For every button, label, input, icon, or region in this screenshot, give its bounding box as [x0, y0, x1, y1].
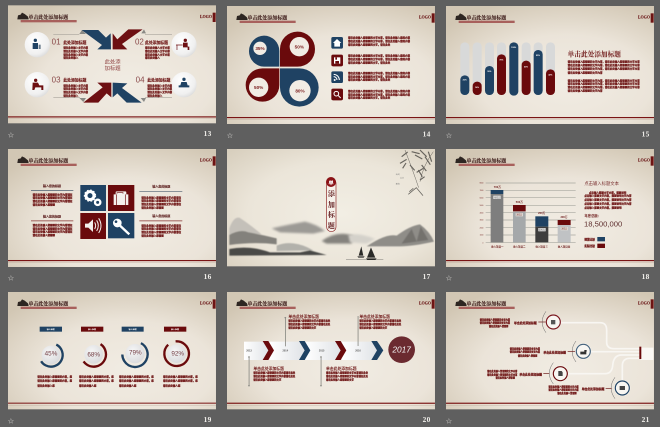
ring captions: 请在此处输入您 — [79, 383, 97, 387]
slide number: 13 — [204, 129, 212, 138]
row text 4: 请在此处输入您需要的文字，请在此处 — [348, 96, 391, 100]
item 01: 请在此处输入文字内容 — [63, 46, 89, 50]
ring 92% — [163, 327, 190, 367]
footer rule — [8, 116, 216, 119]
footer rule — [8, 260, 216, 263]
callout 2013: 请在此处输入您需要的文字内容请在此处 — [253, 374, 296, 378]
capsule bar chart: 42% — [548, 74, 553, 77]
ring captions: 请在此处输入您 — [37, 383, 55, 387]
text block: 请在此处输入您需要的文字内容，请在此处输入您需要的文字内容 — [568, 85, 640, 89]
slide header: LOGO — [419, 301, 431, 306]
text block: upper left: 请在此处输入您需要的文字内容请在 — [33, 193, 73, 197]
item 01: 请在此处输入文字内容 — [63, 52, 89, 56]
row text 3 — [348, 71, 411, 82]
callout 2015 — [326, 366, 369, 381]
total amount: 18,500,000 — [584, 219, 622, 228]
slide header — [455, 156, 654, 166]
slide header: LOGO — [200, 14, 212, 19]
text block: lower left: 请在此处输入您需要的文字内容请在 — [33, 226, 73, 230]
paper background — [227, 149, 435, 266]
text block: lower right: 输入您的标题 — [152, 213, 170, 218]
panel: slide 15 capsule bars — [446, 6, 654, 140]
callout 2014: 单击此处添加标题 — [288, 314, 319, 319]
paper background — [446, 292, 654, 409]
ring 45% — [35, 327, 67, 371]
stacked bar chart: 200万 — [560, 215, 568, 219]
stacked bar chart: 0 — [482, 242, 483, 244]
tile: speaker — [80, 213, 106, 239]
node 3: 请在此处输入您需要的文字内容 — [487, 372, 518, 376]
item 01: 请在此处输入 — [63, 56, 79, 60]
capsule bar chart: 60% — [524, 67, 528, 69]
text block: lower left — [31, 214, 73, 237]
panel: slide 18 stacked bars — [446, 149, 654, 282]
chart heading: 点击输入标题文本 — [584, 180, 620, 187]
item 03: 此处添加标题 — [63, 78, 86, 83]
ring captions: 请在此处输入您 — [163, 383, 181, 387]
footer rule — [227, 403, 435, 405]
stacked bar chart: 8000 — [480, 183, 483, 185]
row text 1: 请在此处输入您需要的文字内容，请在此处输入您的内容 — [348, 36, 411, 40]
capsule bar chart: 50% — [487, 71, 492, 73]
slide header: LOGO — [638, 15, 650, 20]
panel: slide 13 four arrows — [8, 5, 216, 139]
icon: rss — [331, 71, 343, 83]
item 03: 请在此处输入文字内容 — [63, 83, 89, 87]
legend: 实际比较 — [584, 244, 595, 248]
paper background — [446, 6, 654, 124]
slide header: 单击此处添加标题 — [28, 301, 68, 308]
slide number: 21 — [642, 415, 650, 424]
slide header — [17, 156, 216, 166]
item 03: 请在此处输入文字内容 — [63, 90, 89, 94]
capsule bar chart: 75% — [499, 60, 504, 62]
callout 2014 — [288, 314, 331, 329]
panel: slide 17 ink landscape — [227, 149, 435, 281]
timeline band: 2014 — [283, 349, 289, 352]
ring captions: 请在此处输入您 — [119, 383, 137, 387]
year badge 2017 — [388, 336, 415, 363]
row text 3: 请在此处输入您需要的文字内容，请在此处输入您的内容 — [348, 74, 411, 78]
timeline band: 2016 — [355, 349, 361, 352]
slide header: 单击此处添加标题 — [28, 158, 68, 165]
icon: home — [331, 37, 343, 49]
item 03: 请在此处输入 — [63, 93, 79, 97]
text block: upper right: 请在此处输入您需要的文字内容请在 — [141, 199, 182, 203]
slide header: 单击此处添加标题 — [247, 15, 287, 22]
ring 92%: 92% — [171, 350, 184, 357]
slide header: LOGO — [200, 301, 212, 306]
stacked bar chart: 3000 — [480, 220, 483, 222]
stacked bar chart: 300万 — [561, 228, 568, 231]
bamboo — [400, 150, 433, 196]
item 04: 请在此处输入文字内容 — [147, 90, 173, 94]
text block: lower left: 请在此处输入您需要的文字内容请在 — [33, 223, 73, 227]
node 4 — [548, 377, 630, 399]
item 02: 02 — [135, 37, 144, 46]
stacked bar chart: 200万 — [538, 211, 546, 215]
item 01: 01 — [52, 37, 61, 46]
ring captions: 请在此处输入您需要的内容，您 — [79, 379, 114, 383]
node 1: 单击此处添加标题 — [514, 321, 537, 325]
callout 2016: 单击此处添加标题 — [359, 314, 390, 319]
panel: slide 21 pipeline — [446, 292, 654, 425]
stacked bar chart: 300万 — [539, 229, 546, 232]
node 4: 请在此处输入您需要的文字内容 — [548, 388, 579, 392]
ring 68%: 68% — [87, 351, 100, 358]
callout 2016: 请在此处输入您需要的文字内容请在此处 — [359, 319, 402, 323]
text block: lower left: 请在此处输入您需要 — [33, 233, 56, 237]
stacked bar chart: 5000 — [480, 205, 483, 207]
text block: 请在此处输入您需要的文字内容，请在此处输入您需要的文字内容 — [568, 63, 640, 67]
node 1: 请在此处输入您需要的文字内容 — [480, 321, 511, 325]
vertical title: 单 — [328, 178, 334, 186]
ring 45%: 输入标题 — [47, 327, 55, 331]
callout 2013: 单击此处添加标题 — [253, 366, 284, 371]
vertical title: 标 — [328, 210, 336, 219]
legend — [584, 237, 605, 248]
node 1 — [480, 311, 561, 333]
slide header: LOGO — [638, 158, 650, 163]
item 04: 04 — [136, 75, 145, 84]
text block: upper right: 输入您的标题 — [152, 184, 170, 189]
chart description: 点击输入简要文字内容，简要说明文字内容 — [584, 194, 632, 198]
callout 2016 — [359, 314, 402, 329]
star icon: ☆ — [8, 416, 15, 425]
timeline band: 2015 — [319, 349, 325, 352]
text block: 请在此处输入您需要的文字内容，请在此处输入您需要的文字内容 — [568, 60, 640, 64]
connector box — [639, 347, 653, 360]
item 02: 请在此处输入文字内容 — [145, 46, 170, 50]
total amount: 年度总额： — [584, 213, 601, 218]
slide header — [236, 299, 435, 309]
stacked bar chart: 700万 — [494, 185, 501, 189]
node 3 — [487, 363, 568, 384]
item 01: 此处添加标题 — [63, 40, 86, 45]
slide header — [236, 13, 435, 23]
callout 2015: 请在此处输入您需要的文字 — [326, 377, 355, 381]
text block: upper left: 请在此处输入您需要 — [33, 202, 56, 206]
capsule bar chart — [460, 42, 555, 96]
footer rule — [446, 260, 654, 263]
stacked bar chart: 600万 — [494, 196, 501, 199]
item 04: 请在此处输入文字内容 — [147, 83, 173, 87]
centre label: 此处添 — [105, 57, 121, 65]
timeline band: 2013 — [246, 349, 252, 352]
callout 2014: 请在此处输入您需要的文字内容请在此处 — [288, 319, 331, 323]
ring captions: 请在此处输入您需要的内容，您 — [79, 374, 114, 378]
text block: 请在此处输入您需要的文字内容 — [568, 88, 603, 92]
row text 2: 请在此处输入您需要的文字内容，请在此处输入您的内容 — [348, 54, 411, 58]
icon: search — [331, 89, 343, 100]
footer rule — [227, 117, 435, 120]
text block: upper right: 请在此处输入您需要的文字内容请在 — [141, 202, 182, 206]
capsule bar chart: 85% — [536, 55, 540, 57]
stacked bar chart: 300万 — [516, 214, 523, 217]
petal chart — [246, 32, 319, 107]
callout 2016: 请在此处输入您需要的文字 — [359, 325, 388, 329]
text block — [568, 60, 640, 92]
ring captions — [37, 374, 198, 387]
centre label — [105, 57, 121, 72]
ring 45%: 45% — [45, 350, 58, 357]
ring captions: 请在此处输入您需要的内容，您 — [163, 379, 198, 383]
item 02: 请在此处输入文字内容 — [145, 52, 170, 56]
paper background — [227, 6, 435, 124]
slide header: LOGO — [419, 15, 431, 20]
tile: gears — [80, 185, 106, 211]
vertical title: 添 — [328, 189, 336, 198]
legend: 预算比较 — [584, 237, 595, 241]
stacked bar chart: 1000 — [480, 235, 483, 237]
star icon: ☆ — [446, 273, 453, 282]
vertical title: 题 — [328, 221, 335, 230]
paper background — [446, 149, 654, 267]
text block: lower left: 输入您的标题 — [43, 214, 61, 219]
text block: 请在此处输入您需要的文字内容，请在此处输入您需要的文字内容 — [568, 66, 640, 70]
text block: upper right — [139, 184, 182, 209]
paper background — [8, 149, 216, 267]
petal chart: 50% — [295, 44, 305, 49]
node 4: 单击此处添加标题 — [582, 387, 604, 391]
stacked bar chart: 2000 — [480, 227, 483, 229]
text block: lower right: 请在此处输入您需要的文字内容请在 — [141, 230, 182, 234]
ring 79% — [118, 327, 152, 371]
item 02: 请在此处输入文字内容 — [145, 49, 170, 53]
heading: 单击此处添加标题 — [568, 50, 621, 59]
text block: lower right: 请在此处输入您需要的文字内容请在 — [141, 227, 182, 231]
row text 4 — [348, 89, 411, 100]
small poem: 诗词 — [396, 172, 400, 176]
paper background — [227, 292, 435, 409]
year badge 2017: 2017 — [391, 345, 411, 355]
row text 3: 请在此处输入您需要的文字内容，请在此处输入您的内容 — [348, 71, 411, 75]
slide header: 单击此处添加标题 — [247, 301, 287, 308]
text block: 请在此处输入您需要的文字内容，请在此处输入您需要的文字内容 — [568, 82, 640, 86]
ring captions: 请在此处输入您需要的内容，您 — [37, 379, 73, 383]
row text 4: 请在此处输入您需要的文字内容，请在此处输入您的内容 — [348, 92, 411, 96]
chart description — [584, 190, 632, 210]
callout 2013: 请在此处输入您需要的文字 — [253, 377, 282, 381]
panel: slide 20 timeline — [227, 292, 435, 424]
slide number: 14 — [423, 130, 431, 139]
ring 79%: 输入标题 — [129, 327, 137, 331]
text block: 请在此处输入您需要的文字内容，请在此处输入您需要的文字内容 — [568, 78, 640, 82]
item 04: 请在此处输入文字内容 — [147, 87, 173, 91]
callout 2015: 请在此处输入您需要的文字内容请在此处 — [326, 371, 369, 375]
sail boats — [346, 246, 383, 260]
footer rule — [8, 403, 216, 405]
item 03 — [25, 72, 89, 97]
row text 2: 请在此处输入您需要的文字，请在此处 — [348, 60, 391, 64]
chart description: 点击输入简要文字内容，简要说明文字内容 — [584, 202, 632, 206]
icon: disk — [331, 55, 343, 66]
slide header: 单击此处添加标题 — [466, 158, 506, 165]
panel: slide 19 percentage rings — [8, 292, 216, 425]
slide header: 单击此处添加标题 — [28, 14, 68, 21]
callout 2016: 请在此处输入您需要的文字内容请在此处 — [359, 322, 402, 326]
text block: 请在此处输入您需要的文字内容 — [568, 70, 603, 74]
node 3: 请在此处输入您需要 — [496, 376, 516, 380]
node 2 — [510, 341, 591, 362]
white pipes — [560, 323, 641, 381]
star icon: ☆ — [227, 131, 234, 140]
ring captions: 请在此处输入您需要的内容，您 — [119, 379, 154, 383]
text block: upper left: 请在此处输入您需要的文字内容请在 — [33, 196, 73, 200]
callout 2015: 单击此处添加标题 — [326, 366, 357, 371]
slide header — [17, 13, 216, 22]
tile: key — [108, 213, 134, 238]
stacked bar chart — [480, 183, 576, 249]
capsule bar chart: 100% — [511, 47, 516, 49]
item 03: 03 — [52, 75, 61, 84]
ring 79%: 79% — [129, 350, 142, 357]
item 03: 请在此处输入文字内容 — [63, 87, 89, 91]
text block: lower right: 请在此处输入您需要 — [141, 233, 164, 237]
row text 4: 请在此处输入您需要的文字内容，请在此处输入您的内容 — [348, 89, 411, 93]
node 2: 单击此处添加标题 — [543, 350, 566, 354]
ring captions: 请在此处输入您需要的内容，您 — [37, 374, 73, 378]
stacked bar chart: 收入项目四 — [558, 245, 571, 249]
callout 2013 — [253, 366, 296, 381]
text block: lower right: 请在此处输入您需要的文字内容请在 — [141, 223, 182, 227]
row text 1: 请在此处输入您需要的文字内容，请在此处输入您的内容 — [348, 39, 411, 43]
vertical title: 加 — [328, 200, 335, 209]
row text 2 — [348, 54, 411, 64]
star icon: ☆ — [446, 416, 453, 425]
petal chart: 50% — [254, 85, 264, 90]
timeline band — [244, 341, 383, 360]
ring 68%: 输入标题 — [88, 327, 96, 331]
item 02: 此处添加标题 — [145, 40, 168, 45]
arrows — [53, 29, 172, 103]
panel: slide 14 petals — [227, 6, 435, 140]
callout 2014: 请在此处输入您需要的文字 — [288, 325, 317, 329]
ring captions: 请在此处输入您需要的内容，您 — [163, 374, 198, 378]
slide header: LOGO — [200, 158, 212, 163]
item 02 — [135, 32, 197, 60]
star icon: ☆ — [446, 131, 453, 140]
chart description: 点击输入简要文字内容，简要说明文字内容 — [584, 198, 632, 202]
slide header — [455, 13, 654, 23]
slide number: 17 — [423, 272, 431, 281]
callout 2013: 请在此处输入您需要的文字内容请在此处 — [253, 371, 296, 375]
slide number: 18 — [642, 272, 650, 281]
callout 2014: 请在此处输入您需要的文字内容请在此处 — [288, 322, 331, 326]
centre label: 加标题 — [105, 64, 121, 72]
row text 2: 请在此处输入您需要的文字内容，请在此处输入您的内容 — [348, 57, 411, 61]
text block: upper left: 请在此处输入您需要的文字内容请在 — [33, 199, 73, 203]
stacked bar chart: 7000 — [480, 190, 483, 192]
panel: slide 16 icon grid — [8, 149, 216, 282]
text block: lower left: 请在此处输入您需要的文字内容请在 — [33, 230, 73, 234]
item 04: 此处添加标题 — [147, 78, 170, 83]
slide header: 单击此处添加标题 — [466, 15, 506, 22]
row text 3: 请在此处输入您需要的文字，请在此处 — [348, 78, 391, 82]
capsule bar chart: 14% — [475, 86, 479, 89]
item 04: 请在此处输入 — [147, 93, 163, 97]
node 3: 请在此处输入您需要的文字内容 — [487, 369, 518, 373]
text block: upper right: 请在此处输入您需要 — [141, 205, 164, 209]
item 04 — [136, 72, 197, 97]
text block: upper left — [31, 183, 73, 206]
ring 92%: 输入标题 — [171, 327, 179, 331]
slide header — [455, 299, 654, 309]
footer rule — [446, 403, 654, 405]
small poem — [396, 172, 404, 185]
small poem: 意境 — [396, 181, 400, 185]
petal chart: 80% — [295, 88, 306, 93]
text block: upper right: 请在此处输入您需要的文字内容请在 — [141, 195, 182, 199]
vertical title — [326, 177, 336, 232]
slide number: 20 — [423, 415, 431, 424]
tile: suitcase — [108, 185, 134, 211]
slide number: 16 — [204, 272, 212, 281]
ring captions: 请在此处输入您需要的内容，您 — [119, 374, 154, 378]
total amount — [584, 213, 622, 228]
stacked bar chart: 收入项目三 — [535, 245, 548, 249]
node 3: 单击此处添加标题 — [519, 372, 542, 376]
paper background — [8, 5, 216, 123]
paper background — [8, 292, 216, 409]
callout 2015: 请在此处输入您需要的文字内容请在此处 — [326, 374, 369, 378]
slide header: LOGO — [638, 301, 650, 306]
star icon: ☆ — [8, 273, 15, 282]
node 4: 请在此处输入您需要的文字内容 — [548, 384, 579, 388]
ring 68% — [77, 327, 111, 371]
text block: upper left: 输入您的标题 — [43, 183, 61, 188]
item 02: 请在此处输入 — [145, 56, 160, 60]
slide number: 19 — [204, 415, 212, 424]
chart description: 点击输入简要文字内容，简要说明 — [584, 206, 622, 210]
small poem: 山水 — [400, 175, 404, 179]
row text 1 — [348, 36, 411, 46]
slide number: 15 — [642, 130, 650, 139]
petal chart: 35% — [255, 46, 266, 51]
stacked bar chart: 收入项目一 — [491, 245, 504, 249]
stacked bar chart: 收入项目二 — [513, 245, 526, 249]
stacked bar chart: 6000 — [480, 197, 483, 199]
stacked bar chart: 4000 — [480, 212, 483, 214]
item 01: 请在此处输入文字内容 — [63, 49, 89, 53]
row text 1: 请在此处输入您需要的文字，请在此处 — [348, 42, 391, 46]
ink mountains — [229, 218, 434, 256]
node 1: 请在此处输入您需要的文字内容 — [480, 318, 511, 322]
node 2: 请在此处输入您需要的文字内容 — [510, 347, 541, 351]
slide header: 单击此处添加标题 — [466, 301, 506, 308]
node 1: 请在此处输入您需要 — [489, 324, 509, 328]
item 01 — [25, 32, 89, 60]
star icon: ☆ — [8, 130, 15, 139]
node 4: 请在此处输入您需要 — [557, 391, 577, 395]
node 2: 请在此处输入您需要的文字内容 — [510, 350, 541, 354]
chart description: 点击输入简要文字内容，简要说明 — [589, 190, 627, 194]
text block: lower right — [139, 213, 182, 237]
footer rule — [446, 117, 654, 120]
slide header — [17, 299, 216, 309]
stacked bar chart: 500万 — [516, 200, 523, 204]
node 2: 请在此处输入您需要 — [518, 353, 538, 357]
capsule bar chart: 26% — [463, 80, 467, 82]
leader lines — [248, 316, 358, 386]
